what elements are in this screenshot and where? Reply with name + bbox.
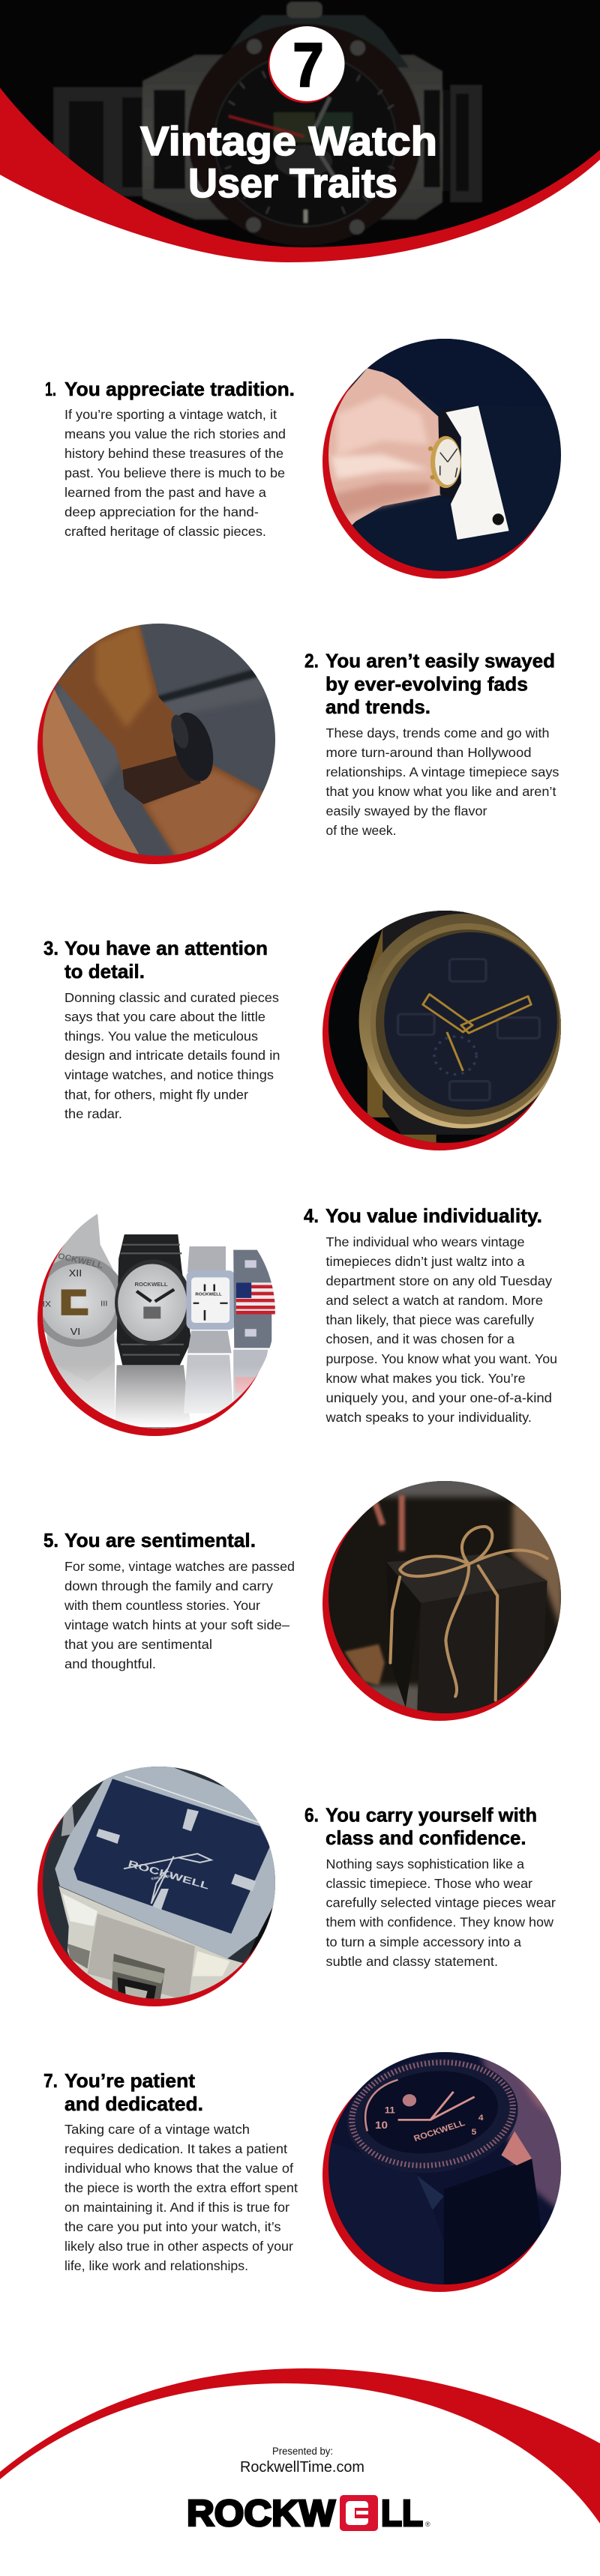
heading: trait 4: You value individuality. [326,1204,542,1227]
text: trait 5 body: with them countless stories. Your [64,1598,260,1613]
photo: gold watch with navy dial [322,907,567,1155]
text: trait 1 body: past. You believe there is much to be [64,465,285,480]
title: User Traits [188,160,398,206]
text: trait 6 body: to turn a simple accessory into a [326,1934,521,1949]
text: trait 4 body: and select a watch at random. More [326,1293,543,1308]
text: trait 2 body [326,726,560,838]
square silver watch: ROCKWELL [195,1293,222,1297]
panel: trait 5 [44,1476,562,1724]
logo: Rockwell: ROCKW [187,2494,336,2534]
text: trait 3 body: that, for others, might fly under [64,1087,248,1102]
heading: trait 3: You have an attention [64,937,268,959]
text: trait 2 body: easily swayed by the flavor [326,803,488,818]
text: trait 5 body: and thoughtful. [64,1656,156,1671]
heading: trait 7: 7. [44,2069,58,2092]
text: trait 4 body [325,1234,557,1425]
heading: trait 2: You aren’t easily swayed [326,649,555,672]
text: trait 6 body [326,1856,556,1969]
photo: duotone navy and pink dive watch: 11 [385,2105,395,2116]
panel: trait 4 [33,1192,557,1436]
title [140,118,437,206]
heading: trait 6: class and confidence. [326,1827,526,1849]
text: trait 6 body: subtle and classy statement. [326,1954,498,1969]
square silver watch [186,1246,236,1353]
panel: trait 2 [34,622,560,866]
logo: Rockwell: LL [381,2494,423,2534]
heading: trait 7: You’re patient [64,2069,195,2092]
heading: trait 7: and dedicated. [64,2093,203,2115]
photo: black gift box tied with twine [322,1476,562,1724]
text: trait 7 body: life, like work and relationships. [64,2258,248,2273]
header photo: dark watch [0,0,600,270]
text: trait 7 body: Taking care of a vintage watch [64,2122,250,2137]
text: trait 1 body: If you’re sporting a vintage watch, it [64,407,277,422]
heading: trait 2: and trends. [326,696,430,718]
photo: row of four Rockwell watches [38,1214,275,1436]
text: trait 7 body [64,2122,298,2273]
heading: trait 2: 2. [304,649,319,672]
text: trait 3 body [64,990,280,1121]
panel: trait 1 [45,337,562,579]
black watch [115,1234,191,1365]
text: trait 7 body: the care you put into your watch, it’s [64,2219,281,2234]
flag watch [233,1250,275,1348]
heading: trait 6: You carry yourself with [326,1803,537,1826]
photo: duotone navy and pink dive watch: 4 [478,2113,484,2123]
text: trait 2 body: that you know what you like and aren’t [326,784,556,799]
heading: trait 2: by ever-evolving fads [326,673,528,696]
text: trait 3 body: Donning classic and curated pieces [64,990,279,1005]
heading: trait 6 [304,1803,537,1849]
photo: rectangular steel watch with navy dial: ROCKWELL [127,1858,211,1892]
watch reflections [54,1349,268,1429]
black watch: ROCKWELL [134,1281,168,1288]
red crescent under header [0,75,600,262]
text: trait 1 body: deep appreciation for the hand- [64,504,259,519]
text: trait 6 body: them with confidence. They know how [326,1914,554,1929]
panel: header [0,0,600,270]
photo: duotone navy and pink dive watch [322,2046,566,2293]
text: trait 4 body: than likely, that piece was carefully [326,1312,534,1327]
photo: duotone navy and pink dive watch: ROCKWELL [412,2118,466,2144]
text: trait 2 body: relationships. A vintage timepiece says [326,764,560,779]
text: trait 7 body: the piece is worth the extra effort spent [64,2180,298,2195]
heading: trait 3 [44,937,268,983]
text: trait 4 body: watch speaks to your individuality. [325,1410,532,1425]
photo: rectangular steel watch with navy dial: SWISS MOVT [151,1874,173,1880]
silver watch: III [100,1300,107,1308]
silver watch: ROCKWELL [50,1250,104,1270]
photo: rectangular steel watch with navy dial [38,1761,287,2011]
text: trait 5 body: down through the family and carry [64,1578,273,1593]
panel: footer [0,2368,600,2534]
text: trait 2 body: These days, trends come and go with [326,726,549,740]
photo: duotone navy and pink dive watch: 10 [375,2120,388,2132]
heading: trait 5: You are sentimental. [64,1529,256,1551]
text: trait 1 body [64,407,286,539]
silver watch [43,1214,118,1365]
text: trait 3 body: vintage watches, and notice things [64,1067,274,1082]
text: trait 4 body: purpose. You know what you want. You [326,1351,557,1366]
red footer arc [0,2368,600,2524]
text: trait 4 body: timepieces didn’t just waltz into a [326,1254,525,1269]
text: trait 6 body: classic timepiece. Those who wear [326,1876,532,1891]
logo: Rockwell [187,2494,430,2534]
text: trait 5 body: vintage watch hints at your soft side– [64,1617,290,1632]
text: trait 1 body: means you value the rich stories and [64,426,286,441]
silver watch: XII [69,1268,82,1279]
text: trait 1 body: crafted heritage of classic pieces. [64,524,266,539]
text: trait 2 body: of the week. [326,823,396,838]
text: trait 4 body: The individual who wears vintage [326,1234,525,1249]
heading: trait 2 [304,649,555,718]
text: trait 3 body: says that you care about the little [64,1009,266,1024]
photo: hand with gold watch and white cuff [322,337,562,579]
heading: trait 1: 1. [45,378,56,400]
text: trait 4 body: chosen, and it was chosen for a [326,1331,514,1346]
panel: trait 6 [38,1761,556,2011]
text: trait 4 body: department store on any old Tuesday [326,1273,552,1288]
text: trait 2 body: more turn-around than Hollywood [326,745,531,760]
text: trait 6 body: Nothing says sophistication like a [326,1856,524,1871]
text: trait 3 body: design and intricate details found in [64,1048,280,1063]
text: website: RockwellTime.com [240,2458,364,2476]
text: trait 5 body [64,1559,295,1671]
text: trait 4 body: know what makes you tick. You’re [326,1371,525,1386]
text: trait 6 body: carefully selected vintage pieces wear [326,1895,556,1910]
text: trait 3 body: things. You value the meticulous [64,1028,258,1043]
silver watch: IX [42,1300,51,1309]
photo: muscular wrist with black watch [34,622,278,866]
panel: trait 3 [44,907,567,1155]
heading: trait 6: 6. [304,1803,319,1826]
heading: trait 3: to detail. [64,960,145,983]
heading: trait 3: 3. [44,937,58,959]
heading: trait 5: 5. [44,1529,58,1551]
text: trait 5 body: For some, vintage watches are passed [64,1559,295,1574]
heading: trait 4: 4. [304,1204,319,1227]
text: trait 3 body: the radar. [64,1106,122,1121]
text: trait 1 body: history behind these treasures of the [64,446,284,461]
text: trait 7 body: individual who knows that the value of [64,2161,293,2176]
badge: number 7: 7 [292,30,324,100]
text: trait 5 body: that you are sentimental [64,1637,212,1652]
heading: trait 7 [44,2069,203,2115]
text: trait 7 body: on maintaining it. And if this is true for [64,2200,290,2215]
badge: number 7 [268,26,345,103]
text: trait 4 body: uniquely you, and your one-of-a-kind [326,1390,552,1405]
text: trait 7 body: likely also true in other aspects of your [64,2239,293,2254]
text: presented by: Presented by: [272,2446,333,2457]
text: trait 1 body: learned from the past and have a [64,485,266,500]
text: trait 7 body: requires dedication. It takes a patient [64,2141,287,2156]
panel: trait 7 [44,2046,566,2293]
silver watch: VI [70,1327,80,1337]
title: Vintage Watch [140,118,437,164]
photo: duotone navy and pink dive watch: 5 [472,2128,477,2137]
heading: trait 1: You appreciate tradition. [64,378,295,400]
logo: Rockwell: ® [425,2521,430,2528]
